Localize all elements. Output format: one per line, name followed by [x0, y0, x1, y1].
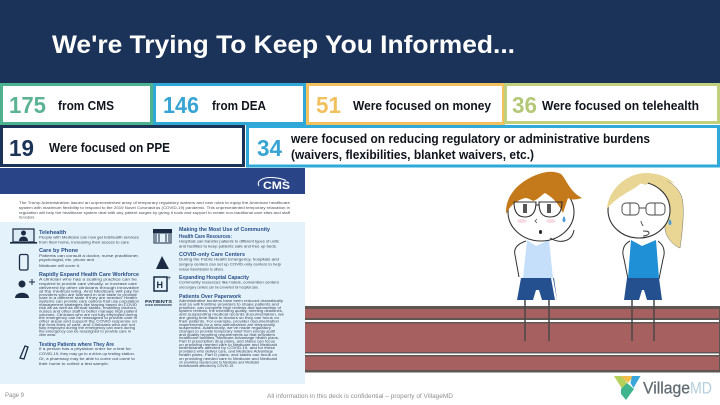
section: Making the Most Use of Community Health Care Resources: Hospitals can transfer patients to different types of units: [179, 238, 279, 244]
stat box: 51 focused on money: Were focused on money: [353, 98, 492, 113]
section: Patients Over Paperwork: healthcare facilities, Medicare Advantage health plans,: [179, 335, 279, 340]
section: COVID-only Care Centers: During the Public Health Emergency, hospitals and: [179, 256, 279, 262]
page number: Page 9: [5, 393, 25, 399]
section: Telehealth: from their home, increasing their access to care: [39, 240, 129, 244]
section: Expanding Hospital Capacity: Community resources like hotels, convention centers: [179, 280, 279, 284]
stat box: 34 focused on regulatory burdens: (waivers, flexibilities, blanket waivers, etc.): [291, 147, 534, 162]
document header with CMS logo: [0, 168, 305, 194]
title banner: [0, 0, 720, 83]
stat box: 36 focused on telehealth: [506, 84, 718, 122]
section: Rapidly Expand Health Care Workforce: other areas and support the COVID response on: [39, 318, 137, 324]
head: [608, 182, 670, 238]
section: Patients Over Paperwork: providers who deliver care, and Medicare Advantage: [179, 348, 273, 354]
section: Patients Over Paperwork: suspended. Additionally, we’ve made regulatory: [179, 325, 271, 330]
section: Expanding Hospital Capacity: and surgery centers can be converted for hospital care.: [179, 284, 259, 290]
section: Patients Over Paperwork: changes to provide temporary relief from energy audit: [179, 328, 276, 334]
section: Care by Phone: Care by Phone: [39, 248, 78, 254]
section: Patients Over Paperwork: beneficiaries affected by COVID-19, and for these: [179, 345, 275, 350]
section: Patients Over Paperwork: Part D prescription drug plans, and states can focus: [179, 338, 275, 344]
section: Testing Patients where They Are: Testing Patients where They Are: [39, 342, 114, 348]
stat box: 34 focused on regulatory burdens: 34: [257, 135, 282, 161]
character: blonde runner: [607, 173, 683, 341]
section: Patients Over Paperwork: Patients Over Paperwork: [179, 294, 242, 300]
vest and shorts: [624, 240, 662, 300]
section: Rapidly Expand Health Care Workforce: systems can provide care options that use population: [39, 298, 139, 304]
document intro paragraph: the locations.: [19, 214, 35, 220]
icon: hospital: [154, 275, 171, 291]
section: Rapidly Expand Health Care Workforce: the front lines of care, and Clinicians who are not: [39, 322, 136, 327]
section: Testing Patients where They Are: [39, 342, 135, 366]
section: Patients Over Paperwork: on providing needed care to Medicare and Medicaid: [179, 342, 277, 347]
section: Rapidly Expand Health Care Workforce: management strategies like staying based on COVID: [39, 302, 137, 307]
stat box: 34 focused on regulatory burdens: were focused on reducing regulatory or administrative burdens: [290, 131, 650, 146]
legs: [632, 298, 654, 341]
section: Making the Most Use of Community Health Care Resources: [179, 227, 279, 248]
stat box: 19 focused on PPE: [2, 126, 244, 166]
section: Testing Patients where They Are: If a person has a physician order for a test for: [39, 346, 132, 351]
section: Rapidly Expand Health Care Workforce: other areas.: [39, 332, 56, 337]
section: Expanding Hospital Capacity: [179, 275, 279, 290]
icon: hospital: H: [156, 280, 163, 290]
icon: test tube: [20, 346, 28, 359]
section: Patients Over Paperwork: beneficiaries affected by COVID-19.: [179, 363, 234, 368]
section: Telehealth: Telehealth: [39, 230, 67, 236]
section: Care by Phone: psychologist, etc. phone and: [39, 257, 94, 262]
logo mark: [614, 376, 640, 400]
stat box: 19 focused on PPE: 19: [9, 135, 34, 161]
section: Rapidly Expand Health Care Workforce: required to provide care virtually, or increase care: [39, 281, 137, 286]
section: Care by Phone: Patients can consult a doctor, nurse practitioner,: [39, 253, 139, 258]
title banner: We're Trying To Keep You Informed...: [52, 31, 515, 59]
section: Rapidly Expand Health Care Workforce: nurses and other staff to better manage high patient: [39, 308, 138, 314]
VillageMD logo: [614, 376, 712, 400]
section: Rapidly Expand Health Care Workforce: fully employed during the emergency can work during: [39, 325, 135, 330]
section: Rapidly Expand Health Care Workforce: at the medical wing. And Medicare will pay for: [39, 288, 140, 294]
section: Patients Over Paperwork: and quality reporting requirements so that providers: [179, 332, 275, 337]
section: Testing Patients where They Are: COVID-19, they may go to a drive-up testing station.: [39, 351, 135, 356]
VillageMD logo: Village: [643, 378, 690, 398]
section: Rapidly Expand Health Care Workforce: the emergency can be reassigned to provide care in: [39, 315, 137, 320]
section: Making the Most Use of Community Health Care Resources: Making the Most Use of Community: [179, 227, 271, 233]
section: Rapidly Expand Health Care Workforce: A clinician who has a scaling practice can be: [39, 276, 137, 282]
stat box: 36 focused on telehealth: 36: [512, 92, 537, 118]
section: Testing Patients where They Are: Or, a pharmacy may be able to come out come to: [39, 356, 135, 361]
section: Making the Most Use of Community Health Care Resources: Health Care Resources:: [179, 234, 232, 240]
running track: [305, 306, 720, 372]
section: Patients Over Paperwork: are giving time back to doctors so they can focus on: [179, 315, 279, 320]
icon: warning triangle: [156, 256, 169, 269]
stat box: 51 focused on money: [308, 84, 504, 124]
glasses and face: [622, 203, 672, 236]
section: Rapidly Expand Health Care Workforce: risk as as well as clinical status, enabling doctors,: [39, 305, 137, 310]
section: Patients Over Paperwork: their patients. For example, provider documentation: [179, 318, 279, 324]
stat box: 36 focused on telehealth: Were focused on telehealth: [542, 98, 699, 113]
icon: phone: [20, 254, 28, 270]
stat box: 19 focused on PPE: Were focused on PPE: [49, 140, 170, 155]
arms: [623, 241, 664, 279]
section: Rapidly Expand Health Care Workforce: delivered by other clinicians through innovative: [39, 285, 139, 290]
stat box: 34 focused on regulatory burdens: [248, 126, 718, 166]
section: Rapidly Expand Health Care Workforce: providers who are licensed in one state to provide: [39, 292, 137, 297]
section: Patients Over Paperwork: requirements for a new authorization are temporarily: [179, 322, 275, 327]
section: Patients Over Paperwork: on providing needed care to Medicare and Medicaid: [179, 356, 277, 361]
stat box: 146 from DEA: from DEA: [212, 98, 266, 113]
vest and shorts: [517, 240, 557, 300]
confidentiality footer: All information in this deck is confidential – property of VillageMD: [267, 393, 453, 400]
section: Patients Over Paperwork: health plans, Part D plans, and states can focus on: [179, 352, 277, 357]
icon: laptop: [10, 229, 37, 244]
section: COVID-only Care Centers: surgery centers can set up COVID-only centers to help: [179, 262, 281, 266]
section: COVID-only Care Centers: [179, 252, 281, 272]
section: Care by Phone: Medicare will cover it.: [39, 263, 80, 268]
section: Patients Over Paperwork: and suspending medical records documentation, we: [179, 312, 284, 316]
icon: building: [153, 229, 172, 243]
stat box: 175 from CMS: 175: [9, 92, 46, 118]
section: Patients Over Paperwork: on providing needed care to Medicare and Medicaid: [179, 360, 259, 364]
section: Patients Over Paperwork: Administrative burdens have been reduced dramatically: [179, 298, 283, 303]
legs: [525, 298, 549, 341]
document header with CMS logo: CMS: [263, 180, 290, 192]
stat box: 51 focused on money: 51: [316, 92, 341, 118]
section: Making the Most Use of Community Health Care Resources: and facilities to keep patients safe and free up beds.: [179, 244, 277, 248]
arms: [515, 241, 526, 277]
glasses: [514, 202, 562, 217]
section: Rapidly Expand Health Care Workforce: care in a different state if they are needed. Health: [39, 295, 137, 300]
section: Telehealth: [39, 230, 139, 244]
section: Rapidly Expand Health Care Workforce: [39, 272, 140, 337]
CMS document panel: [0, 168, 305, 384]
document intro paragraph: The Trump Administration issued an unprecedented array of temporary regulatory waivers and new rules to equip the American healthcare: [19, 200, 290, 205]
eyes and face: [517, 204, 566, 234]
icon: patients over paperwork: PATIENTS: [145, 299, 173, 305]
section: COVID-only Care Centers: COVID-only Care Centers: [179, 252, 245, 258]
head: [508, 183, 574, 241]
section: COVID-only Care Centers: reduce transmission to others.: [179, 266, 224, 272]
document intro paragraph: system with maximum flexibility to respond to the 2019 Novel Coronavirus (COVID-19) pandemic. This unprecedented temporary relaxation in: [19, 205, 290, 210]
document intro paragraph: [19, 200, 291, 220]
section: Patients Over Paperwork: prioritize, can complete high reviews and automation of: [179, 305, 282, 310]
hair front: [607, 173, 675, 209]
stat box: 175 from CMS: [2, 84, 152, 124]
section: Patients Over Paperwork: and so will frontline providers to shape patients and: [179, 302, 279, 306]
icon: patients over paperwork: [145, 299, 173, 307]
document intro paragraph: regulation will help the healthcare system deal with any patient surges by giving it tools and support to create non-traditional care sites and staff: [19, 210, 291, 215]
stat box: 175 from CMS: from CMS: [58, 98, 114, 113]
section: Care by Phone: [39, 248, 139, 268]
character: brown-haired runner: [506, 172, 582, 341]
VillageMD logo: MD: [690, 378, 712, 398]
section: Patients Over Paperwork: system reviews, the extending quality, meeting deadlines,: [179, 308, 283, 313]
icon: hospital: +: [167, 275, 171, 282]
hair: [506, 172, 582, 214]
stat box: 146 from DEA: [154, 84, 304, 124]
section: Expanding Hospital Capacity: Expanding Hospital Capacity: [179, 275, 250, 281]
section: Testing Patients where They Are: their home to collect a test sample.: [39, 361, 109, 366]
section: Patients Over Paperwork: [179, 294, 284, 368]
icon: patients over paperwork: OVER PAPERWORK: [145, 303, 172, 307]
section: Telehealth: People with Medicare can now get telehealth services: [39, 234, 139, 240]
icon: care workers: [15, 279, 35, 298]
stat box: 146 from DEA: 146: [163, 92, 199, 118]
hand on face: [550, 230, 574, 241]
section: Rapidly Expand Health Care Workforce: Rapidly Expand Health Care Workforce: [39, 272, 139, 278]
section: Rapidly Expand Health Care Workforce: the emergency can be reassigned to provide care in: [39, 328, 131, 334]
hair back: [640, 174, 683, 248]
section: Rapidly Expand Health Care Workforce: volumes. Clinicians who are not fully employed during: [39, 312, 137, 317]
